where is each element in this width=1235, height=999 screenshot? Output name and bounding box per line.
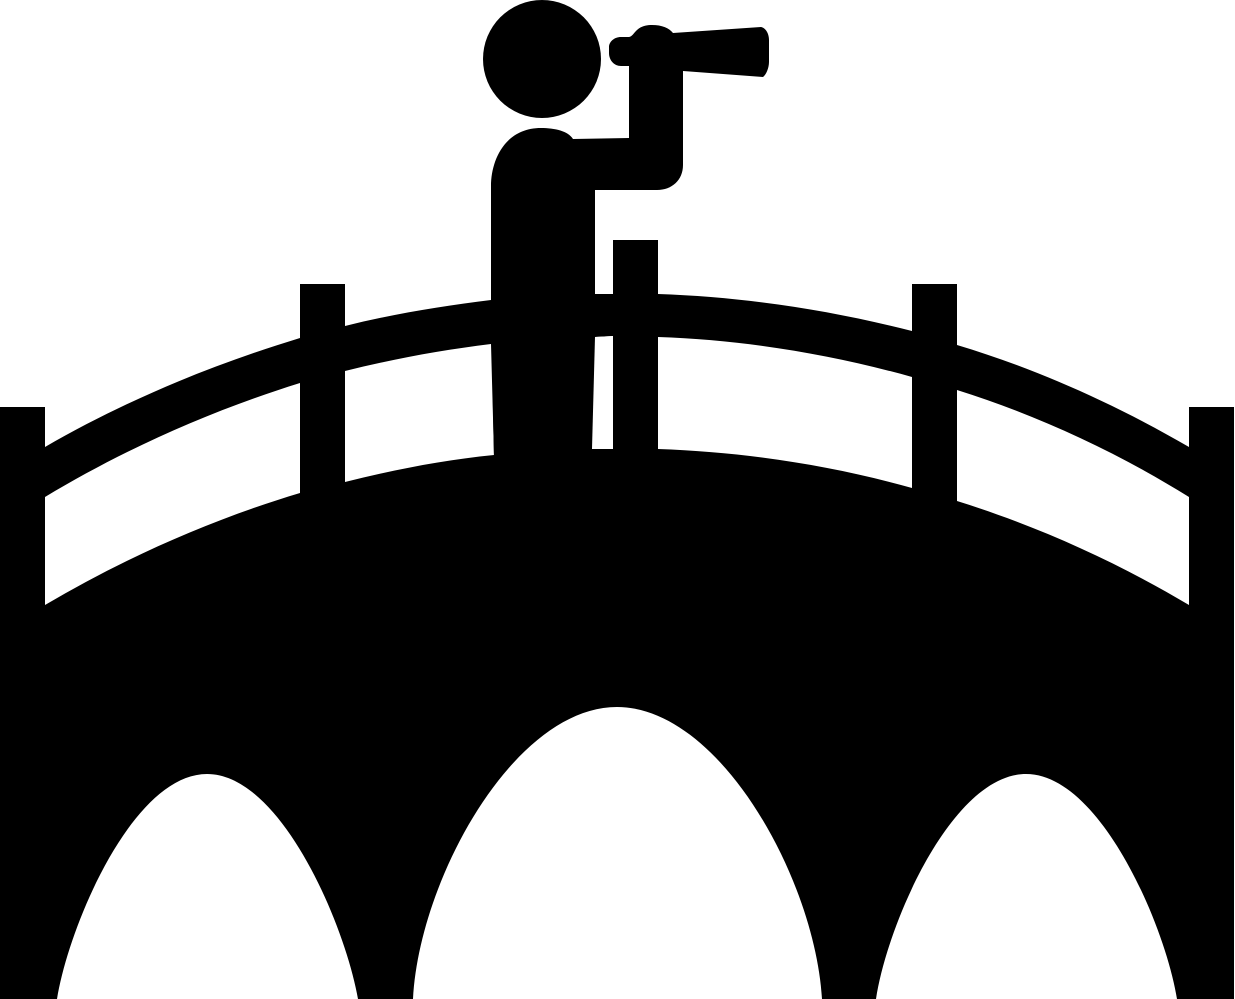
bridge deck with arches	[0, 240, 1234, 999]
railing opening 2	[345, 344, 494, 482]
gap beside body	[592, 336, 613, 449]
railing opening 1	[45, 383, 300, 605]
railing opening 3	[592, 336, 613, 449]
railing opening 4	[658, 337, 912, 488]
person	[483, 0, 769, 460]
railing opening 5	[957, 390, 1189, 605]
bridge	[0, 240, 1234, 999]
body and arm	[491, 25, 769, 460]
head	[483, 0, 601, 118]
